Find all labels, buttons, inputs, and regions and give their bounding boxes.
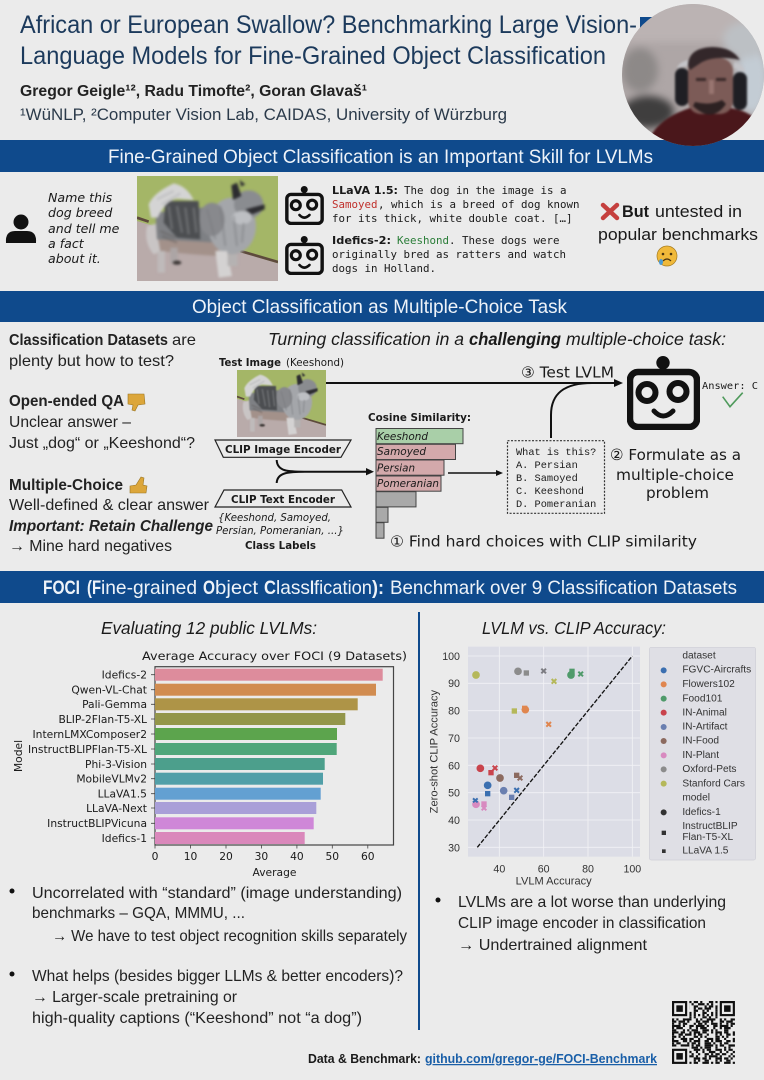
question box: C. Keeshond [516,486,584,498]
footer: data and benchmark link: github.com/gregor-ge/FOCI-Benchmark [425,1052,657,1066]
axis labels: 10 [184,850,197,863]
similarity bars [376,428,463,538]
diagonal reference line [477,656,632,847]
Idefics answer: Idefics-2: [332,234,391,247]
LLaVA answer: , which is a breed of dog known [378,198,580,211]
scatter plot: LVLM vs CLIP accuracy: 40 [448,815,460,827]
CLIP image encoder [215,440,351,457]
model labels: Idefics-1 [102,832,147,845]
title: African or European Swallow? Benchmarking Large Vision- [20,11,637,39]
banner: FOCI: (F [87,577,101,599]
bullets: left column: What helps (besides bigger LLMs & better encoders)? [32,968,403,985]
legend: IN-Animal [682,707,727,718]
icon: thumbs up [130,477,147,493]
model labels: InstructBLIPVicuna [47,817,147,830]
text block: how to test: Well-defined & clear answer [9,497,210,514]
callout: untested: But [622,202,649,221]
heading: challenging multiple-choice: multiple-choice task: [566,329,726,349]
label: formulate: multiple-choice [616,466,734,484]
text block: how to test: plenty but how to test? [9,353,174,370]
tick labels: LVLM Accuracy [516,875,592,887]
test image [237,370,326,437]
bars [155,669,383,844]
scatter plot: LVLM vs CLIP accuracy: 100 [442,651,460,663]
question box [508,441,604,513]
model labels: LLaVA1.5 [98,788,147,800]
tick labels: Zero-shot CLIP Accuracy [429,689,441,813]
diagram: multiple-choice pipeline [215,356,758,552]
portrait photo [620,0,764,150]
scatter plot: LVLM vs CLIP accuracy: 60 [448,760,460,772]
model labels: Pali-Gemma [82,698,147,711]
legend: IN-Artifact [682,721,728,732]
legend: model [682,793,710,804]
similarity bars: Keeshond [377,431,428,443]
authors: Gregor Geigle¹², Radu Timofte², Goran Glavaš¹ [20,83,367,100]
prompt text [48,190,120,266]
label: formulate: ② Formulate as a [610,446,741,464]
prompt text: Name this [48,190,113,205]
circle markers [472,667,575,808]
banner: FOCI: ): [372,577,384,599]
prompt text: about it. [48,251,101,266]
text block: how to test: Unclear answer – [9,414,131,431]
banner: fine-grained classification [0,140,764,172]
scatter plot: LVLM vs CLIP accuracy [429,647,756,887]
banner: FOCI [0,571,764,603]
cross markers [473,669,583,810]
model labels: Qwen-VL-Chat [71,684,147,696]
bullets: left column: high-quality captions (“Keeshond” not “a dog”) [32,1010,362,1027]
column divider [418,612,420,1030]
model labels: LLaVA-Next [86,802,147,815]
bullets: right column: LVLMs are a lot worse than underlying [458,894,726,911]
axis labels: 50 [325,850,339,863]
legend: IN-Plant [682,750,719,761]
QR code [672,1001,735,1064]
tick labels: 40 [493,863,505,875]
icon: robot Idefics [287,236,322,273]
axis labels [12,740,375,879]
legend: Oxford-Pets [682,764,737,775]
CLIP text encoder [215,490,351,507]
model labels [28,668,147,845]
bullets: left column: → We have to test object recognition skills separately [52,928,407,945]
heading: cosine similarity: Cosine Similarity: [368,412,471,424]
legend: dataset [682,650,716,661]
callout: untested [598,202,758,266]
scatter plot: LVLM vs CLIP accuracy: 90 [448,678,460,690]
question box: A. Persian [516,460,578,472]
label: formulate [610,446,741,502]
banner: FOCI: FOCI [43,577,80,599]
legend: Flowers102 [682,679,735,690]
legend: Food101 [682,693,723,704]
title [20,11,637,70]
panel: example prompt [6,176,758,281]
similarity bars: Samoyed [377,446,426,458]
question box: What is this? [516,447,596,459]
answer output: Answer: C [702,381,758,392]
CLIP image encoder: CLIP Image Encoder [225,443,342,456]
scatter plot: LVLM vs CLIP accuracy: 30 [448,842,460,854]
LLaVA answer: LLaVA 1.5: [332,184,398,197]
similarity bars: Persian [377,462,415,474]
banner: FOCI: ine-grained [101,577,197,599]
label: formulate: problem [646,484,709,502]
dog photo [137,176,278,281]
icon: person [6,214,36,243]
heading: challenging multiple-choice [268,329,726,349]
tick labels: 60 [538,863,550,875]
arrow: similarity to question [448,470,503,476]
axis labels: 30 [255,850,268,863]
axis labels: 60 [361,850,375,863]
LLaVA answer: for its thick, white double coat. […] [332,212,573,225]
bullets: left column: benchmarks – GQA, MMMU, ... [32,905,245,922]
scatter plot: LVLM vs CLIP accuracy: 70 [448,733,460,745]
banner: multiple-choice task: Object Classification as Multiple-Choice Task [192,296,567,318]
LLaVA answer: Samoyed [332,198,378,211]
model labels: Idefics-2 [102,668,147,682]
title accent block [640,17,656,31]
affiliations: ¹WüNLP, ²Computer Vision Lab, CAIDAS, University of Würzburg [20,105,507,124]
LLaVA answer: The dog in the image is a [404,184,567,197]
icon: large robot [630,356,697,427]
arrow: question to LVLM [551,383,592,438]
icon: thumbs down [128,394,145,411]
icon: robot LLaVA [287,186,322,223]
bullets: right column: CLIP image encoder in classification [458,915,706,932]
axis labels: 20 [219,850,233,863]
callout: untested: popular benchmarks [598,225,758,244]
footer: data and benchmark link: Data & Benchmark: [308,1052,421,1066]
bar chart: average accuracy: Average Accuracy over FOCI (9 Datasets) [142,649,407,663]
test image label [219,357,344,369]
banner: FOCI: bject [215,577,259,599]
legend: Flan-T5-XL [682,832,733,843]
model labels: BLIP-2Flan-T5-XL [58,713,147,726]
model labels: Phi-3-Vision [85,758,147,771]
legend: Stanford Cars [682,778,745,789]
title: Language Models for Fine-Grained Object Classification [20,42,606,70]
tick labels [429,689,641,887]
Idefics answer: originally bred as ratters and watch [332,248,566,261]
prompt text: and tell me [48,221,120,236]
text block: how to test: are [172,332,196,349]
text block: how to test: Classification Datasets [9,332,168,349]
icon: sad face [657,246,677,266]
legend: Idefics-1 [682,807,721,818]
banner: FOCI: I [310,577,314,599]
model labels: MobileVLMv2 [76,772,147,786]
axis labels: 0 [152,850,159,863]
class labels: Persian, Pomeranian, ...} [216,525,344,537]
arrow: image to LVLM [326,379,623,387]
icon: check mark [723,393,743,407]
banner: FOCI: C [264,577,276,599]
legend [649,647,756,860]
banner: FOCI: Benchmark over 9 Classification Datasets [390,577,737,599]
class labels: {Keeshond, Samoyed, [218,512,331,524]
CLIP text encoder: CLIP Text Encoder [231,493,336,506]
label: test LVLM: ③ Test LVLM [521,364,614,382]
heading: challenging multiple-choice: challenging [469,329,561,349]
text block: how to test: Multiple-Choice [9,477,123,494]
similarity bars: Pomeranian [377,478,439,490]
tick labels: 80 [582,863,594,875]
bullets: left column: → Larger-scale pretraining or [32,989,238,1006]
bullets: left column: Uncorrelated with “standard” (image understanding) [32,885,402,902]
heading: evaluating LVLMs: Evaluating 12 public LVLMs: [101,618,317,638]
test image label: Test Image [219,357,281,369]
class labels [216,512,344,552]
bullets: right column [436,894,726,954]
bullets: left column [10,885,407,1027]
label: find hard choices: ① Find hard choices with CLIP similarity [390,532,697,550]
tick labels: 100 [623,863,641,875]
test image label: (Keeshond) [286,357,344,369]
icon: cross [603,205,617,218]
Idefics answer: dogs in Holland. [332,262,436,275]
model labels: InternLMXComposer2 [33,728,147,741]
LLaVA answer [332,184,580,225]
square markers [481,669,575,807]
prompt text: a fact [48,236,85,251]
text block: how to test: Just „dog“ or „Keeshond“? [9,435,195,452]
heading: LVLM vs CLIP: LVLM vs. CLIP Accuracy: [482,618,666,638]
banner: FOCI: O [203,577,215,599]
arrow: encoders to similarity [277,460,374,483]
text block: how to test [9,332,213,555]
text block: how to test: Open-ended QA [9,393,124,410]
banner: FOCI: lass [276,577,310,599]
axis labels: 40 [290,850,304,863]
question box: D. Pomeranian [516,499,596,511]
Idefics answer [332,234,566,275]
legend: IN-Food [682,736,719,747]
callout: untested: untested in [655,202,742,221]
banner: fine-grained classification: Fine-Grained Object Classification is an Important Skill for LVLMs [108,146,653,168]
banner: multiple-choice task [0,291,764,322]
legend: InstructBLIP [682,821,738,832]
legend: LLaVA 1.5 [682,846,729,857]
Idefics answer: . These dogs were [449,234,560,247]
banner: FOCI: fication [314,577,372,599]
heading: challenging multiple-choice: Turning classification in a [268,329,464,349]
scatter plot: LVLM vs CLIP accuracy: 50 [448,788,460,800]
bar chart: average accuracy [12,649,407,879]
class labels: Class Labels [245,540,316,552]
axis labels: Model [12,740,25,772]
axis labels: Average [253,866,296,879]
bullets: right column: → Undertrained alignment [458,937,648,954]
prompt text: dog breed [48,205,113,220]
legend: FGVC-Aircrafts [682,665,751,676]
footer: data and benchmark link [308,1052,657,1066]
model labels: InstructBLIPFlan-T5-XL [28,743,147,756]
text block: how to test: → Mine hard negatives [9,538,172,555]
question box: B. Samoyed [516,473,578,485]
text block: how to test: Important: Retain Challenge [9,518,213,535]
answer output [702,381,758,407]
Idefics answer: Keeshond [397,234,449,247]
scatter plot: LVLM vs CLIP accuracy: 80 [448,706,460,718]
